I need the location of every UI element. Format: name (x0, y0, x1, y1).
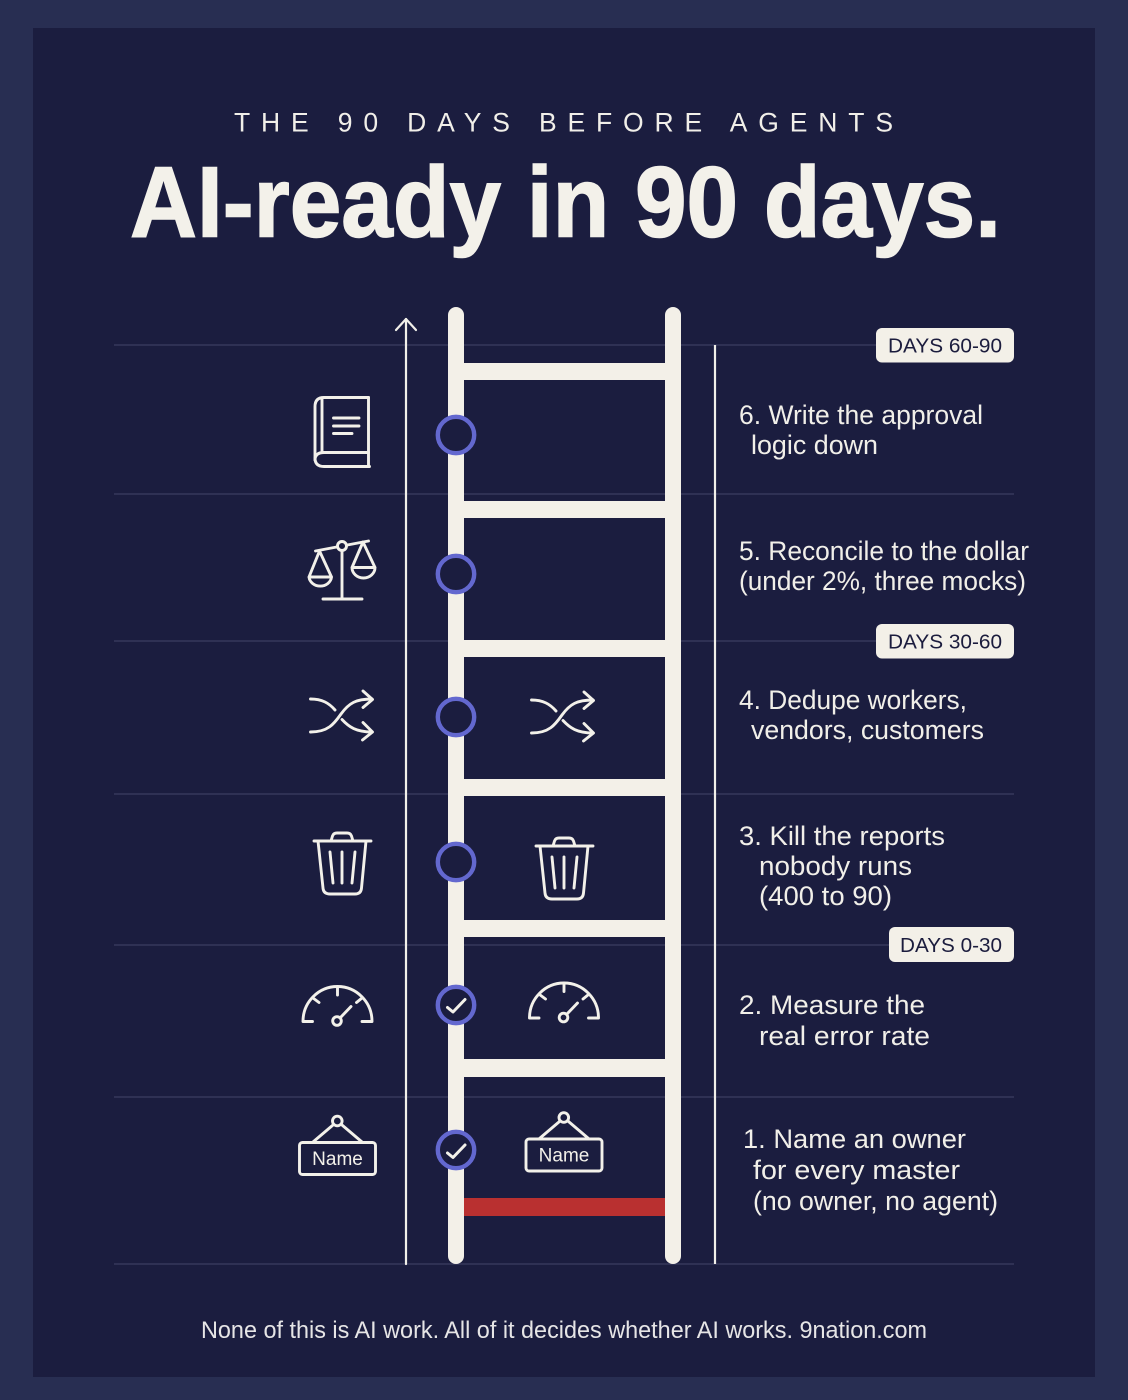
right vertical rule (714, 345, 716, 1264)
text: step 3: nobody runs (759, 851, 912, 881)
text: step 2: 2. Measure the (739, 990, 925, 1020)
text: step 1: (no owner, no agent) (753, 1186, 998, 1216)
step marker 6 (438, 417, 474, 453)
step marker 1: done (438, 1132, 474, 1168)
text: step 4 (739, 685, 984, 745)
icon: trash left (314, 833, 371, 894)
arrow: upward progress axis (396, 319, 416, 1264)
text: step 5: 5. Reconcile to the dollar (739, 536, 1029, 566)
icon: balance scales (309, 541, 375, 599)
text: step 2: real error rate (759, 1021, 930, 1051)
icon: book (315, 398, 370, 466)
text: step 1: for every master (753, 1155, 960, 1185)
icon: trash centre (536, 838, 593, 899)
icon: shuffle left (310, 691, 372, 740)
text: step 3: (400 to 90) (759, 881, 892, 911)
text: step 5: (under 2%, three mocks) (739, 566, 1026, 596)
step marker 5 (438, 556, 474, 592)
badge: days 30-60: DAYS 30-60 (888, 632, 1002, 654)
text: step 3 (739, 821, 945, 911)
text: step 2 (739, 990, 930, 1051)
icon: gauge centre (530, 983, 598, 1022)
text: step 4: vendors, customers (751, 715, 984, 745)
text: step 5 (739, 536, 1029, 596)
step marker 3 (438, 844, 474, 880)
text: step 4: 4. Dedupe workers, (739, 685, 967, 715)
title: AI-ready in 90 days. (130, 146, 1001, 258)
eyebrow heading: THE 90 DAYS BEFORE AGENTS (234, 108, 893, 138)
text: step 1 (743, 1124, 998, 1216)
icon: gauge left (303, 986, 372, 1025)
badge: days 0-30 (889, 927, 1014, 962)
icon: name sign left: Name (312, 1149, 363, 1170)
step marker 4 (438, 699, 474, 735)
red bottom rung (464, 1198, 665, 1216)
text: step 6: logic down (751, 430, 878, 460)
badge: days 60-90: DAYS 60-90 (888, 336, 1002, 358)
badge: days 30-60 (876, 624, 1014, 658)
footer note: None of this is AI work. All of it decides whether AI works. 9nation.com (201, 1317, 927, 1344)
text: step 6 (739, 400, 983, 460)
ladder rungs (464, 363, 665, 1077)
icon: name sign centre (526, 1113, 602, 1171)
icon: shuffle centre (532, 692, 594, 741)
badge: days 60-90 (876, 328, 1014, 362)
ladder rails (456, 315, 673, 1256)
step marker 2: done (438, 987, 474, 1023)
icon: name sign left (300, 1116, 376, 1174)
text: step 3: 3. Kill the reports (739, 821, 945, 851)
text: step 1: 1. Name an owner (743, 1124, 966, 1154)
text: step 6: 6. Write the approval (739, 400, 983, 430)
ladder (456, 315, 673, 1256)
badge: days 0-30: DAYS 0-30 (900, 935, 1002, 957)
icon: name sign centre: Name (539, 1146, 589, 1166)
